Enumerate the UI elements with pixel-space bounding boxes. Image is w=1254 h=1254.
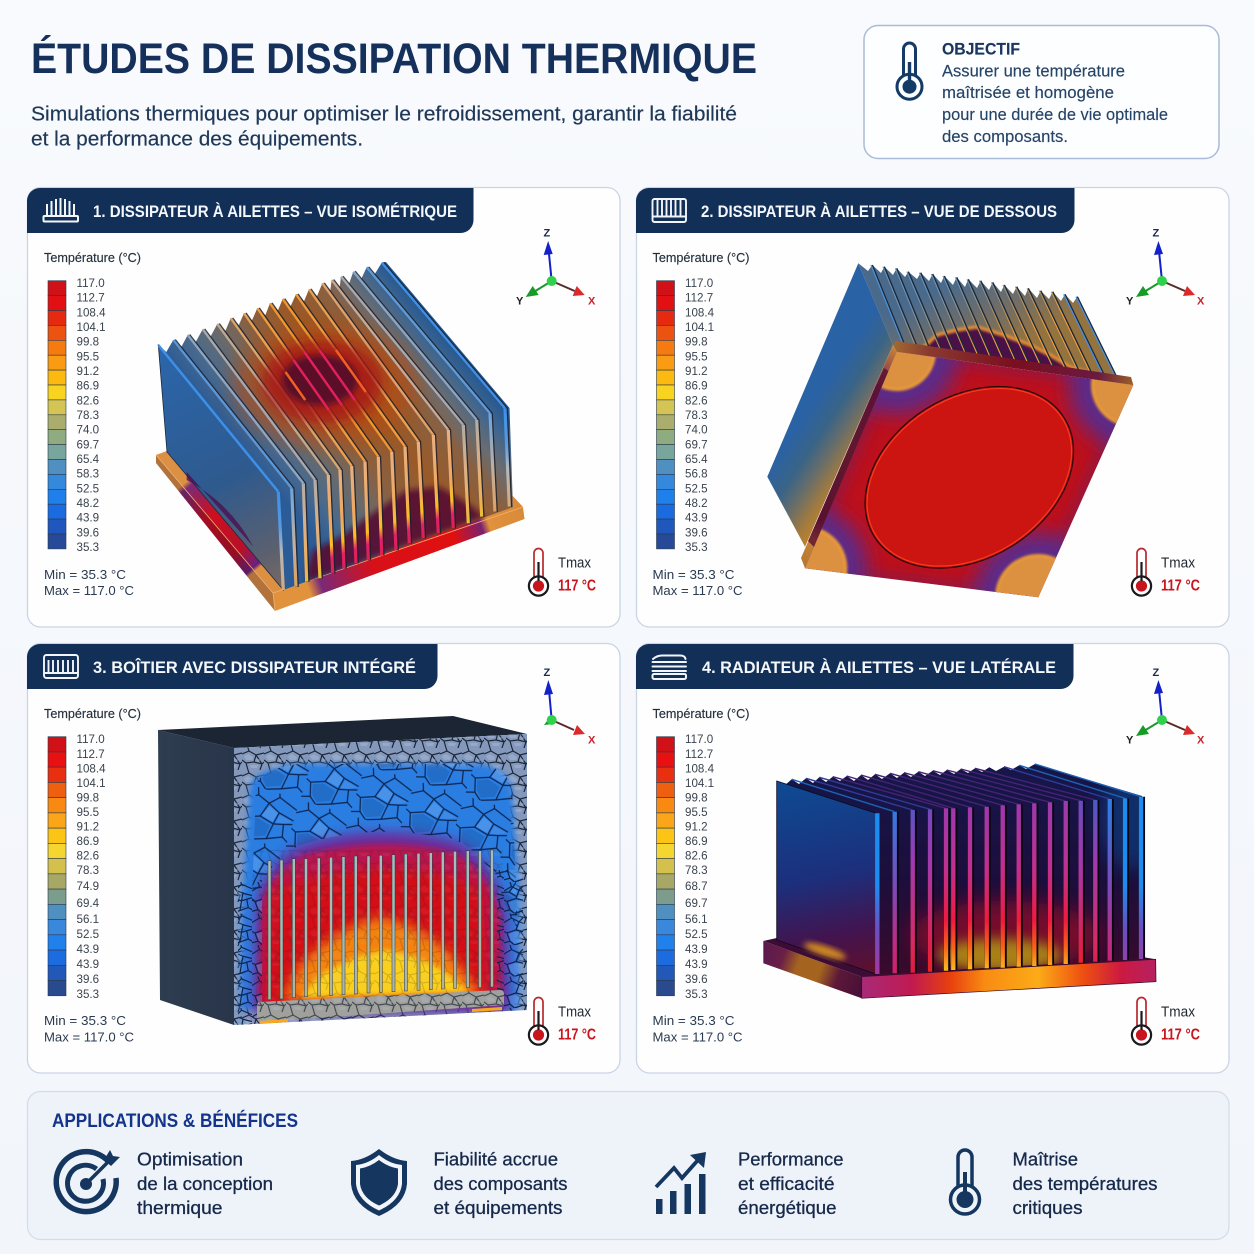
- icon: thermometer objectif: [897, 43, 922, 99]
- legend 1: 69.7: [76, 438, 99, 451]
- legend 2: 65.4: [685, 453, 708, 466]
- axes triad 2: X: [1197, 296, 1205, 308]
- legend 3: 52.5: [76, 928, 99, 941]
- legend 3: 91.2: [76, 820, 99, 834]
- legend 3: 35.3: [76, 988, 99, 1001]
- legend 2: 52.5: [685, 482, 708, 495]
- benefit text 2: des composants: [434, 1174, 568, 1194]
- benefit text 3: énergétique: [738, 1198, 836, 1218]
- axes triad 2: [1126, 228, 1205, 308]
- axes triad 2: Z: [1152, 228, 1160, 240]
- legend 2: 78.3: [685, 409, 708, 422]
- header tab 4: [636, 644, 1074, 689]
- title: ÉTUDES DE DISSIPATION THERMIQUE: [31, 35, 757, 83]
- legend 2: 43.9: [685, 512, 708, 525]
- legend 4: 39.6: [685, 973, 708, 986]
- base left face: [763, 941, 862, 998]
- axes triad 1: [516, 228, 596, 308]
- heatsink 2: underside: [767, 263, 1134, 598]
- legend 4: 86.9: [685, 835, 708, 848]
- enclosure top face: [158, 716, 527, 748]
- legend 3: 43.9: [76, 943, 99, 956]
- benefit text 1: [137, 1150, 273, 1218]
- legend 3: 39.6: [76, 973, 99, 986]
- legend 4: 56.1: [685, 913, 708, 926]
- header text 3: 3. BOÎTIER AVEC DISSIPATEUR INTÉGRÉ: [93, 658, 416, 677]
- enclosure left face: [158, 730, 234, 1025]
- callout text: Assurer une température: [942, 62, 1125, 80]
- legend 2: 48.2: [685, 497, 708, 510]
- callout text: des composants.: [942, 128, 1068, 146]
- legend 4: 112.7: [685, 748, 713, 761]
- fin field: [777, 764, 1142, 974]
- fin edges dark outline: [174, 263, 510, 587]
- legend 3: Min = 35.3 °C: [44, 1013, 126, 1028]
- legend 3: 104.1: [76, 777, 106, 790]
- dark fin shadows: [896, 797, 1142, 973]
- legend 3: 56.1: [76, 913, 99, 926]
- legend 4: [652, 707, 750, 1044]
- icon: growth chart: [656, 1152, 706, 1214]
- axes triad 1: Y: [516, 296, 524, 308]
- legend 2: Max = 117.0 °C: [652, 583, 742, 598]
- icon: radiator 4: [652, 656, 686, 679]
- Tmax badge 3: [529, 998, 596, 1045]
- legend 4: 91.2: [685, 820, 708, 834]
- axes triad 1: Z: [544, 228, 550, 240]
- legend 3: 108.4: [76, 762, 106, 776]
- legend 1: 112.7: [76, 292, 105, 305]
- axes triad 2: Y: [1126, 296, 1134, 308]
- axes triad 4: Y: [1126, 734, 1134, 746]
- benefit text 4: [1012, 1150, 1158, 1218]
- header text 1: 1. DISSIPATEUR À AILETTES – VUE ISOMÉTRIQUE: [93, 202, 457, 221]
- legend 4: Min = 35.3 °C: [652, 1013, 734, 1028]
- legend 1: 91.2: [76, 365, 99, 378]
- legend 3: [44, 707, 141, 1044]
- header tab 3: [27, 644, 438, 689]
- benefit text 4: critiques: [1012, 1198, 1082, 1218]
- legend 1: 39.6: [76, 526, 99, 539]
- Tmax badge 2: [1132, 548, 1200, 596]
- legend 2: 56.8: [685, 468, 708, 481]
- Tmax badge 2: Tmax: [1161, 554, 1195, 572]
- Tmax badge 3: Tmax: [558, 1004, 591, 1020]
- panel 1: vue isométrique: [27, 188, 620, 627]
- legend 4: 108.4: [685, 762, 715, 776]
- legend 3: 82.6: [76, 850, 99, 862]
- legend 1: 43.9: [76, 512, 99, 525]
- Tmax badge 3: 117 °C: [558, 1026, 596, 1044]
- Tmax badge 4: [1132, 998, 1200, 1045]
- axes triad 3: X: [588, 734, 596, 746]
- header tab 1: [27, 188, 474, 233]
- legend 2: 99.8: [685, 336, 708, 349]
- icon: heatsink 1: [44, 198, 78, 222]
- legend 2: Température (°C): [652, 251, 750, 265]
- fin top edges: [158, 263, 505, 492]
- fin top lines: [792, 764, 1141, 812]
- legend 1: 78.3: [76, 409, 99, 422]
- benefit text 4: Maîtrise: [1012, 1150, 1078, 1170]
- axes triad 4: [1126, 667, 1205, 746]
- panel: applications et bénéfices: [28, 1092, 1229, 1240]
- legend 2: 104.1: [685, 321, 714, 334]
- legend 3: Température (°C): [44, 707, 141, 721]
- legend 1: Température (°C): [44, 251, 141, 265]
- header tab 2: [636, 188, 1074, 233]
- legend 1: 74.0: [76, 424, 99, 437]
- header text 2: 2. DISSIPATEUR À AILETTES – VUE DE DESSOUS: [701, 202, 1057, 221]
- legend 4: 117.0: [685, 733, 713, 746]
- legend 2: 74.0: [685, 424, 708, 437]
- benefit text 1: thermique: [137, 1198, 222, 1218]
- legend 2: 39.6: [685, 526, 708, 539]
- legend 1: 48.2: [76, 497, 99, 510]
- icon: heatsink 2: [652, 199, 686, 222]
- legend 4: 95.5: [685, 806, 708, 819]
- legend 3: 112.7: [76, 748, 105, 761]
- Tmax badge 1: [529, 548, 596, 596]
- heatsink base plate: [257, 990, 504, 1022]
- axes triad 1: X: [588, 296, 596, 308]
- legend 3: 117.0: [76, 733, 105, 746]
- benefit text 2: Fiabilité accrue: [434, 1150, 558, 1170]
- Tmax badge 2: 117 °C: [1161, 578, 1200, 594]
- legend 1: [44, 251, 141, 598]
- benefit text 3: Performance: [738, 1150, 844, 1170]
- legend 3: 99.8: [76, 792, 99, 804]
- legend 3: 69.4: [76, 897, 100, 910]
- header text 4: 4. RADIATEUR À AILETTES – VUE LATÉRALE: [702, 658, 1056, 677]
- legend 2: 35.3: [685, 541, 708, 554]
- first fin face: [777, 781, 876, 974]
- legend 2: [652, 251, 750, 598]
- legend 1: 104.1: [76, 321, 106, 334]
- subtitle: Simulations thermiques pour optimiser le refroidissement, garantir la fiabilité: [31, 104, 737, 126]
- heatsink fins in section: [268, 850, 494, 1000]
- subtitle: [31, 104, 737, 150]
- subtitle: et la performance des équipements.: [31, 128, 363, 150]
- legend 1: 95.5: [76, 350, 99, 363]
- panel 3: boîtier: [27, 644, 620, 1073]
- callout text: [942, 40, 1168, 146]
- fin front edges: [877, 797, 1141, 974]
- base front face: [862, 959, 1156, 998]
- legend 3: 86.9: [76, 835, 99, 848]
- fin front edges: [278, 408, 509, 590]
- legend 4: 35.3: [685, 988, 708, 1001]
- legend 4: 43.9: [685, 958, 708, 971]
- heatsink 1: isometric: [156, 262, 524, 611]
- meshed front section: [234, 734, 527, 1030]
- legend 1: 52.5: [76, 482, 99, 495]
- legend 2: 91.2: [685, 365, 708, 378]
- legend 4: 43.9: [685, 943, 708, 956]
- benefit text 3: et efficacité: [738, 1174, 834, 1194]
- fin lines: [872, 265, 1116, 376]
- callout text: maîtrisée et homogène: [942, 84, 1114, 102]
- panel 4: vue latérale: [636, 644, 1229, 1073]
- legend 3: 74.9: [76, 880, 99, 893]
- legend 2: 69.7: [685, 438, 708, 451]
- Tmax badge 4: 117 °C: [1161, 1026, 1200, 1044]
- legend 1: 108.4: [76, 306, 106, 319]
- legend 2: 108.4: [685, 306, 715, 319]
- Tmax badge 1: 117 °C: [558, 578, 596, 594]
- axes triad 4: X: [1197, 734, 1205, 746]
- callout text: pour une durée de vie optimale: [942, 106, 1168, 124]
- base plate face: [805, 352, 1134, 598]
- legend 1: 58.3: [76, 468, 99, 481]
- legend 4: Température (°C): [652, 707, 750, 721]
- base top face: [763, 938, 1156, 977]
- axes triad 4: Z: [1152, 667, 1160, 679]
- legend 2: 95.5: [685, 350, 708, 363]
- legend 4: Max = 117.0 °C: [652, 1030, 742, 1044]
- icon: target: [56, 1150, 120, 1212]
- legend 3: 43.9: [76, 958, 99, 971]
- legend 4: 68.7: [685, 880, 708, 893]
- legend 4: 82.6: [685, 850, 708, 862]
- benefit text 4: des températures: [1012, 1174, 1158, 1194]
- legend 1: 65.4: [76, 453, 100, 466]
- hot arch on fins: [923, 327, 1097, 375]
- callout: objectif: [864, 26, 1219, 158]
- legend 2: 82.6: [685, 394, 708, 407]
- legend 1: 99.8: [76, 336, 99, 349]
- enclosure with integrated heatsink: [158, 716, 527, 1030]
- legend 4: 69.7: [685, 897, 708, 910]
- legend 2: 112.7: [685, 292, 713, 305]
- legend 1: 82.6: [76, 394, 99, 407]
- first fin face: [767, 263, 893, 547]
- first fin face: [158, 345, 283, 590]
- icon: thermometer: [950, 1150, 980, 1214]
- legend 4: 99.8: [685, 792, 708, 804]
- contact disc: [831, 349, 1107, 605]
- legend 1: 117.0: [76, 277, 105, 290]
- legend 1: Max = 117.0 °C: [44, 583, 134, 598]
- section heading: APPLICATIONS & BÉNÉFICES: [52, 1110, 298, 1132]
- axes triad 3: [544, 667, 596, 746]
- legend 1: 86.9: [76, 380, 99, 393]
- legend 4: 78.3: [685, 864, 708, 877]
- legend 2: 117.0: [685, 277, 713, 290]
- legend 3: Max = 117.0 °C: [44, 1030, 134, 1044]
- legend 4: 104.1: [685, 777, 714, 790]
- legend 4: 52.5: [685, 928, 708, 941]
- benefit text 3: [738, 1150, 844, 1218]
- benefit text 2: [434, 1150, 568, 1218]
- axes triad 3: Z: [544, 667, 550, 679]
- base plate sides: [801, 345, 897, 568]
- Tmax badge 1: Tmax: [558, 554, 591, 572]
- benefit text 2: et équipements: [434, 1198, 562, 1218]
- callout text: OBJECTIF: [942, 40, 1020, 58]
- legend 2: 86.9: [685, 380, 708, 393]
- legend 1: 35.3: [76, 541, 99, 554]
- Tmax badge 4: Tmax: [1161, 1004, 1195, 1020]
- icon: shield: [351, 1149, 407, 1216]
- legend 2: Min = 35.3 °C: [652, 567, 734, 582]
- heatsink 4: side view: [763, 764, 1160, 998]
- icon: enclosure 3: [44, 655, 78, 678]
- legend 1: Min = 35.3 °C: [44, 567, 126, 582]
- legend 3: 95.5: [76, 806, 99, 819]
- legend 3: 78.3: [76, 864, 99, 877]
- benefit text 1: de la conception: [137, 1174, 273, 1194]
- panel 2: vue de dessous: [636, 188, 1229, 661]
- hot spot on fins: [262, 341, 382, 423]
- benefit text 1: Optimisation: [137, 1150, 243, 1170]
